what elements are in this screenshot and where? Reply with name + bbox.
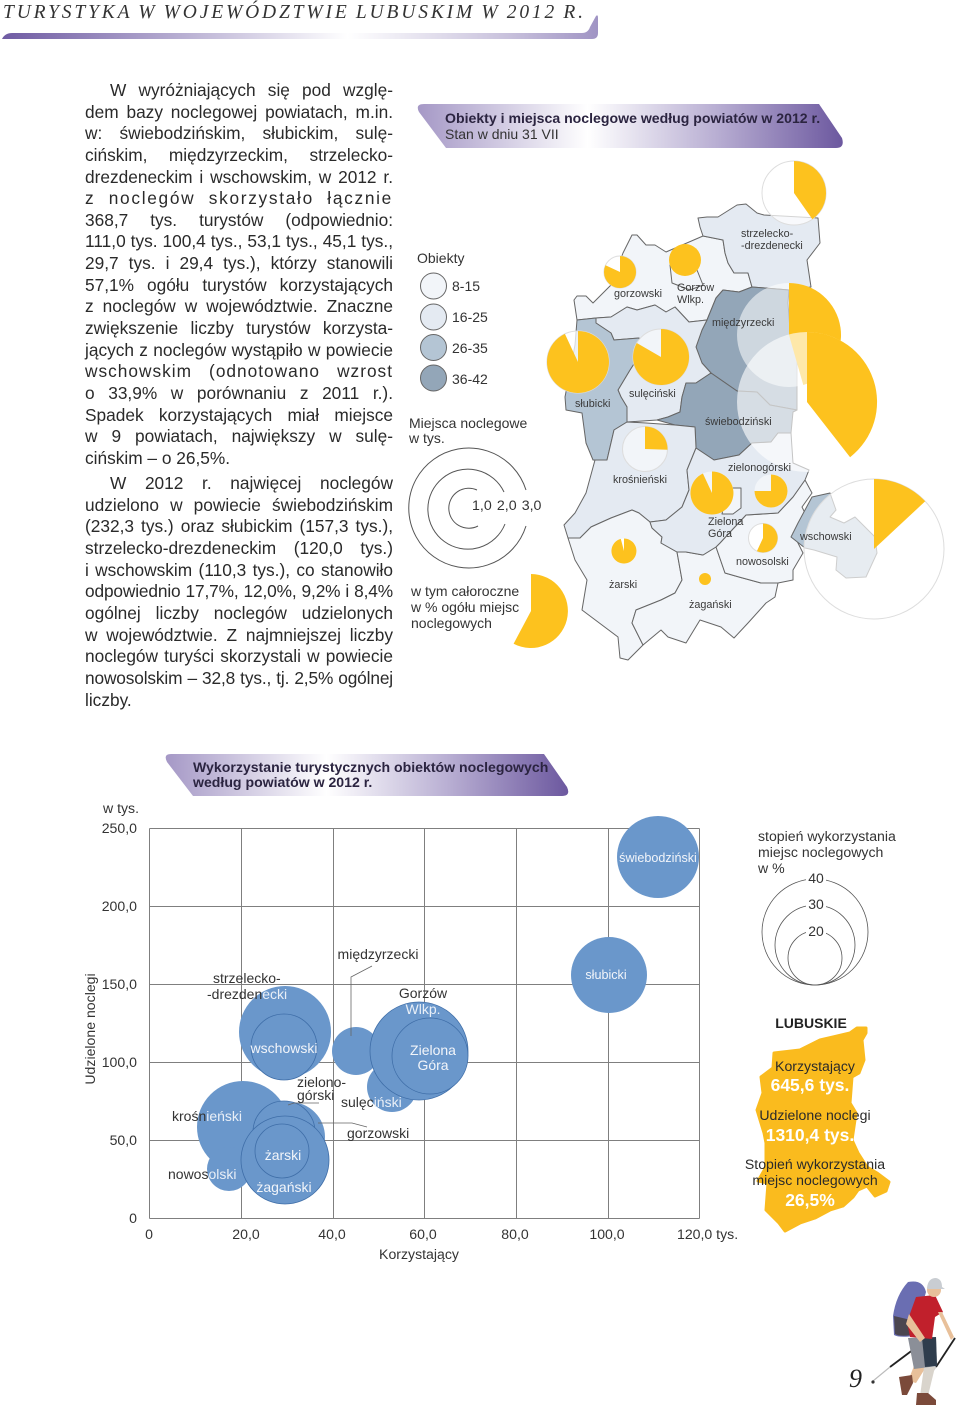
county labels: świebodziński [705, 416, 772, 428]
bubble size legend [757, 828, 896, 985]
body text block: cińskim, międzyrzeckim, strzelecko- [85, 145, 393, 165]
body text block: udzielono w powiecie świebodzińskim [85, 495, 393, 515]
y axis labels: 0 [129, 1210, 137, 1226]
body text block: w: świebodzińskim, słubickim, sulę- [85, 123, 393, 143]
body text block: dem bazy noclegowej powiatach, m.in. [85, 102, 393, 122]
pie: słubicki [547, 331, 609, 393]
pie: żagański [699, 573, 711, 585]
page header [2, 1, 598, 39]
body text block: drezdeneckim i wschowskim, w 2012 r. [85, 167, 393, 187]
body text block: w 9 powiatach, największy w sulę- [85, 426, 393, 446]
body text block: W 2012 r. najwięcej noclegów [110, 473, 393, 493]
pie: strzelecko-drezdenecki [762, 161, 826, 225]
chart heading banner [166, 754, 568, 796]
bubble labels: zielono- [297, 1074, 346, 1090]
county labels: wschowski [799, 531, 852, 543]
bubble labels: Gorzów [399, 985, 448, 1001]
map heading banner: Stan w dniu 31 VII [445, 126, 559, 142]
pie: sulęciński [633, 329, 689, 385]
x axis labels: 40,0 [318, 1226, 346, 1242]
y axis labels: 250,0 [102, 820, 137, 836]
county labels: Wlkp. [677, 294, 704, 306]
body text block: w województwie. Z najmniejszej liczby [85, 625, 393, 645]
bubble labels [168, 851, 697, 1195]
bubble labels: wschowski [250, 1040, 317, 1056]
x axis labels: 80,0 [501, 1226, 529, 1242]
bubble labels: słubicki [585, 968, 627, 982]
y axis labels: w tys. [102, 800, 139, 816]
backpack [893, 1281, 926, 1337]
x axis labels [145, 1226, 738, 1262]
pie: Gorzów Wlkp. [669, 244, 701, 276]
bubble size legend: 30 [808, 896, 824, 912]
body text block: 57,1% ogółu turystów korzystających [85, 275, 393, 295]
map legend: number of establishments: Obiekty [417, 250, 464, 266]
body text block: i wschowskim (110,3 tys.), co stanowiło [85, 560, 393, 580]
head with cap [927, 1283, 941, 1297]
bubble size legend: w % [757, 860, 785, 876]
map legend: bed places scale [408, 415, 542, 568]
body text block: strzelecko-drezdeneckim (120,0 tys.) [85, 538, 393, 558]
boots [899, 1375, 913, 1395]
map legend: number of establishments: 26-35 [452, 340, 488, 356]
pie: wschowski [804, 479, 944, 619]
legs [908, 1366, 926, 1383]
body text block: 111,0 tys. 100,4 tys., 53,1 tys., 45,1 tys., [85, 231, 393, 251]
pie: zielonogórski [754, 474, 788, 508]
county labels [575, 228, 852, 611]
bubble labels: żarski [265, 1147, 301, 1163]
pie: międzyrzecki [737, 283, 841, 387]
bubble labels: żagański [256, 1179, 312, 1195]
body text block: noclegów turyści skorzystali w powiecie [85, 646, 393, 666]
county labels: zielonogórski [728, 462, 791, 474]
bubble labels: międzyrzecki [338, 946, 418, 962]
y axis labels [82, 800, 139, 1226]
chart heading banner: według powiatów w 2012 r. [192, 774, 372, 790]
map legend: year-round share: noclegowych [411, 615, 492, 631]
bubble labels: Wlkp. [406, 1001, 440, 1017]
map legend: bed places scale: Miejsca noclegowe [409, 415, 527, 431]
map legend: bed places scale: w tys. [408, 430, 445, 446]
county labels: Góra [708, 528, 732, 540]
body text block [84, 80, 393, 710]
county labels: międzyrzecki [712, 317, 774, 329]
chart grid [150, 828, 700, 1218]
totals text: Udzielone noclegi [759, 1107, 871, 1123]
body text block: W wyróżniających się pod wzglę- [110, 80, 393, 100]
county labels: gorzowski [614, 288, 662, 300]
LUBUSKIE label: LUBUSKIE [775, 1015, 847, 1031]
x axis labels: 0 [145, 1226, 153, 1242]
y axis labels: 200,0 [102, 898, 137, 914]
totals text: miejsc noclegowych [752, 1172, 878, 1188]
body text block: ogólnej liczby noclegów udzielonych [85, 603, 393, 623]
county labels: sulęciński [629, 388, 676, 400]
county labels: słubicki [575, 398, 610, 410]
hiker poles [890, 1343, 922, 1367]
bubble labels: krośnieński [172, 1108, 242, 1124]
bubble labels: górski [297, 1087, 334, 1103]
x axis labels: Korzystający [379, 1246, 460, 1262]
body text block: z noclegów w województwie. Znaczne [85, 296, 393, 316]
pie: Zielona Góra [690, 472, 734, 514]
bubble leader lines [288, 966, 372, 1127]
county pies: bed places with year-round share [547, 161, 944, 619]
county labels: Zielona [708, 516, 743, 528]
page number: 9 [849, 1364, 862, 1393]
body text block: zwiększenie liczby turystów korzysta- [85, 318, 393, 338]
x axis labels: 120,0 tys. [677, 1226, 738, 1242]
map legend: year-round share: w tym całoroczne [410, 583, 519, 599]
body text block: o 33,9% w porównaniu z 2011 r.). [85, 383, 393, 403]
body text block: jących z noclegów wystąpiło w powiecie [85, 340, 393, 360]
map legend: year-round share: w % ogółu miejsc [410, 599, 519, 615]
map legend: number of establishments: 36-42 [452, 371, 488, 387]
pie: gorzowski [604, 256, 636, 288]
bubble labels: Góra [417, 1057, 449, 1073]
body text block: nowosolskim – 32,8 tys., tj. 2,5% ogólnej [85, 668, 393, 688]
map legend: bed places scale: 1,0 2,0 3,0 [472, 498, 542, 514]
body text block: 29,7 tys. i 29,4 tys.), którzy stanowili [85, 253, 393, 273]
header ribbon [2, 15, 598, 39]
red shirt [907, 1295, 943, 1339]
map legend: number of establishments: 16-25 [452, 309, 488, 325]
body text block: (232,3 tys.) oraz słubickim (157,3 tys.), [85, 516, 393, 536]
county labels: żarski [609, 579, 637, 591]
county labels: krośnieński [613, 474, 667, 486]
bubble size legend: stopień wykorzystania [758, 828, 896, 844]
x axis labels: 20,0 [232, 1226, 260, 1242]
illustration: hiker with poles [871, 1278, 955, 1405]
pie: świebodziński [737, 332, 877, 472]
body text block: odpowiednio 17,7%, 12,0%, 9,2% i 8,4% [85, 581, 393, 601]
pie: żarski [611, 538, 636, 564]
map heading banner: Obiekty i miejsca noclegowe według powiatów w 2012 r. [445, 110, 820, 126]
bubbles [197, 816, 699, 1204]
county labels: strzelecko- [741, 228, 794, 240]
bubble size legend: miejsc noclegowych [758, 844, 883, 860]
map legend: number of establishments: 8-15 [452, 278, 480, 294]
panel: map of accommodation by county [408, 104, 944, 660]
county labels: Gorzów [677, 282, 714, 294]
body text block: wschowskim (odnotowano wzrost [85, 361, 393, 381]
body text block: 368,7 tys. turystów (odpowiednio: [85, 210, 393, 230]
voivodeship silhouette [757, 1028, 889, 1231]
body text block: cińskim – o 26,5%. [85, 448, 230, 468]
body text block: z noclegów skorzystało łącznie [85, 188, 393, 208]
bubble labels: gorzowski [347, 1125, 409, 1141]
totals text: Stopień wykorzystania [745, 1156, 885, 1172]
totals text: 645,6 tys. [771, 1075, 849, 1095]
bubble labels: sulęciński [341, 1094, 402, 1110]
x axis labels: 60,0 [409, 1226, 437, 1242]
map legend: number of establishments [417, 250, 488, 391]
shorts [908, 1337, 937, 1369]
totals text: 1310,4 tys. [766, 1125, 854, 1145]
bubble labels: -drezdenecki [207, 986, 287, 1002]
title: TURYSTYKA W WOJEWÓDZTWIE LUBUSKIM W 2012 R. [3, 1, 586, 23]
bubble labels: strzelecko- [213, 970, 281, 986]
bubble labels: świebodziński [619, 851, 697, 865]
bubble labels: Zielona [410, 1042, 456, 1058]
map heading banner [418, 104, 843, 148]
panel: Lubuskie totals [745, 1015, 889, 1231]
body text block: Spadek korzystających miał miejsce [85, 405, 393, 425]
x axis labels: 100,0 [589, 1226, 625, 1242]
totals text: Korzystający [775, 1058, 856, 1074]
county labels: nowosolski [736, 556, 789, 568]
bubble size legend: 40 [808, 870, 824, 886]
county labels: żagański [689, 599, 732, 611]
y axis labels: 150,0 [102, 976, 137, 992]
chart heading banner: Wykorzystanie turystycznych obiektów noclegowych [193, 759, 548, 775]
totals text [745, 1058, 885, 1210]
bubble labels: nowosolski [168, 1166, 236, 1182]
map legend: year-round share [410, 574, 568, 648]
pie: nowosolski [748, 523, 778, 552]
choropleth map of counties [564, 204, 877, 660]
pie: krośnieński [622, 426, 668, 472]
y axis labels: Udzielone noclegi [82, 973, 98, 1085]
county labels: -drezdenecki [741, 240, 803, 252]
body text block: liczby. [85, 690, 132, 710]
bubble size legend: 20 [808, 923, 824, 939]
arms [906, 1314, 925, 1342]
totals text: 26,5% [785, 1190, 835, 1210]
y axis labels: 50,0 [110, 1132, 137, 1148]
y axis labels: 100,0 [102, 1054, 137, 1070]
panel: bubble chart of tourist accommodation use [82, 754, 896, 1262]
